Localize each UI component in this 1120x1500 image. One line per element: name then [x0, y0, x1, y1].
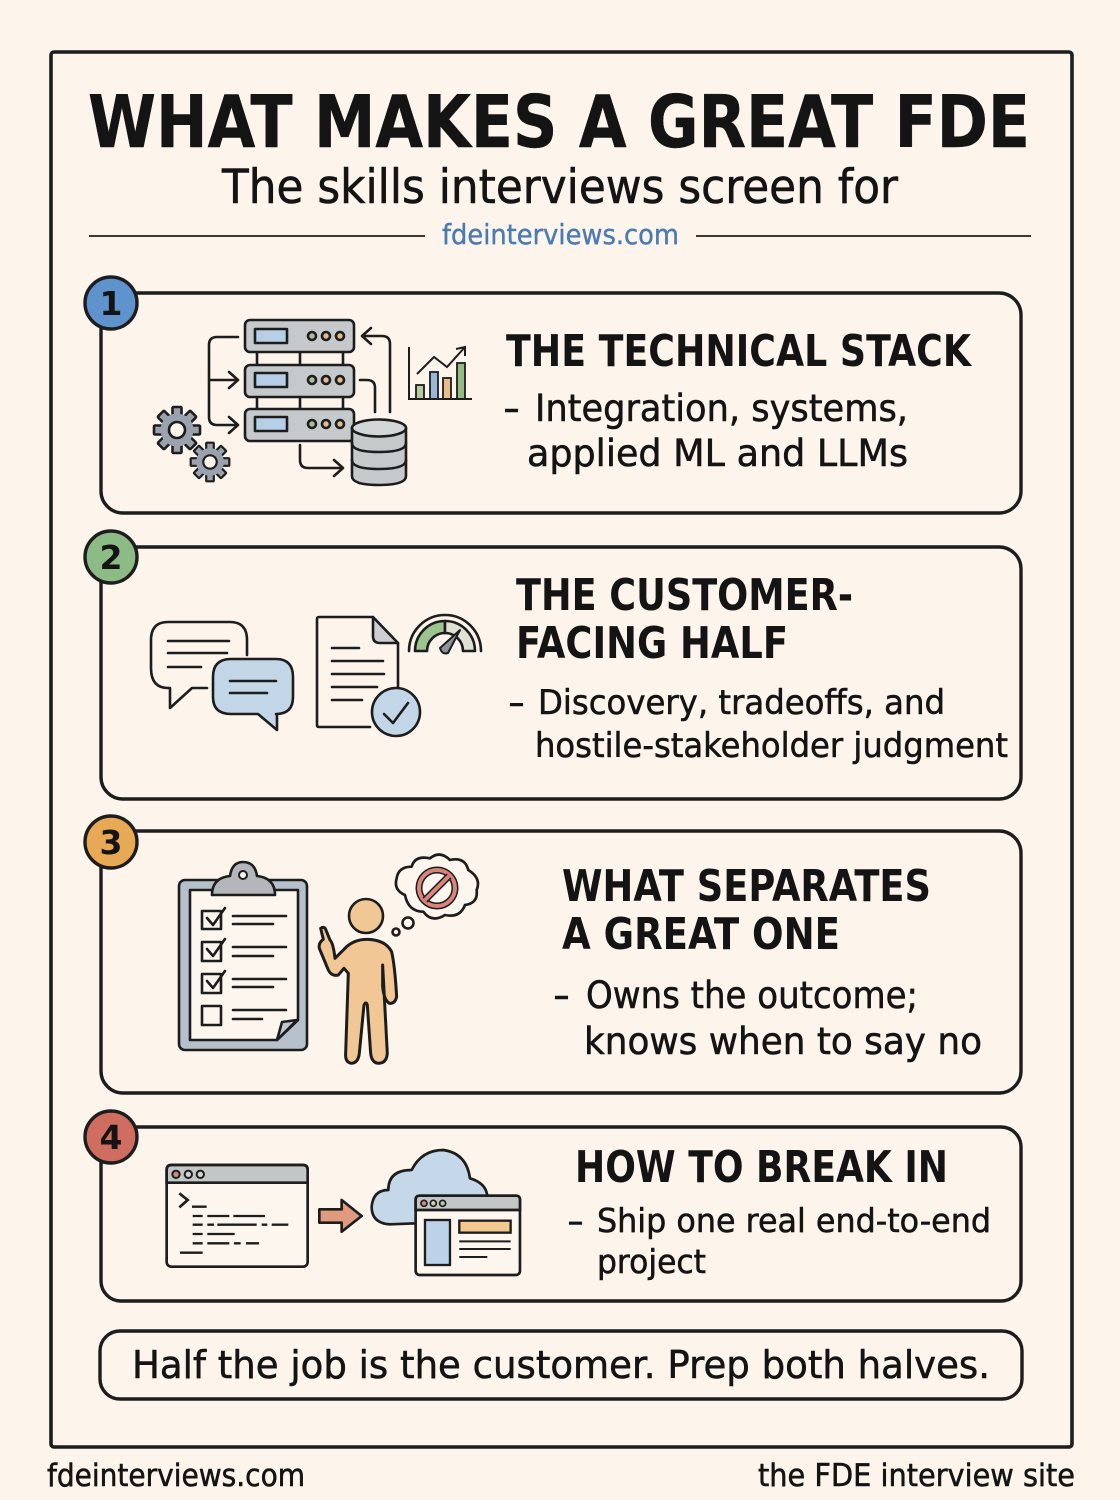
icon: servers, database, gears and chart — [154, 320, 472, 485]
heading 2: THE CUSTOMER- — [516, 570, 853, 621]
description 4: Ship one real end-to-end — [597, 1201, 991, 1240]
icon: gauge — [409, 615, 481, 653]
icon: thought bubble with no sign — [392, 855, 478, 936]
description 3 — [553, 974, 982, 1063]
heading 2: FACING HALF — [516, 618, 788, 669]
panel 3: what separates a great one — [85, 816, 1021, 1093]
heading 3: A GREAT ONE — [562, 909, 840, 960]
description 2 — [508, 683, 1008, 766]
panel 1: the technical stack — [85, 277, 1021, 513]
badge 2 — [85, 531, 137, 583]
description 2: Discovery, tradeoffs, and — [538, 683, 945, 723]
icon: growth chart — [409, 347, 472, 399]
footer left: fdeinterviews.com — [47, 1458, 305, 1494]
panel 4: how to break in — [85, 1111, 1021, 1301]
icon: chat bubbles — [151, 622, 293, 730]
badge 2: 2 — [100, 538, 122, 577]
website link with rules: fdeinterviews.com — [442, 218, 679, 251]
description 3: knows when to say no — [584, 1020, 982, 1063]
icon: person thinking — [319, 855, 478, 1063]
heading 3: WHAT SEPARATES — [562, 861, 931, 912]
callout: takeaway — [100, 1331, 1022, 1399]
badge 1 — [85, 277, 137, 329]
badge 1: 1 — [100, 284, 122, 323]
heading 3 — [562, 861, 931, 960]
icon: document with check — [317, 617, 420, 736]
description 3: Owns the outcome; — [586, 974, 918, 1017]
badge 3: 3 — [100, 823, 122, 862]
icon: terminal window — [167, 1165, 308, 1267]
description 4: project — [597, 1242, 706, 1281]
description 1 — [503, 387, 908, 475]
footer right: the FDE interview site — [758, 1458, 1075, 1494]
heading 4: HOW TO BREAK IN — [575, 1142, 948, 1193]
callout: takeaway: Half the job is the customer. Prep both halves. — [132, 1343, 990, 1387]
heading 1: THE TECHNICAL STACK — [506, 326, 973, 377]
description 1: - — [503, 387, 520, 430]
icon: cloud with browser window — [372, 1150, 520, 1275]
heading 2 — [516, 570, 853, 669]
description 1: Integration, systems, — [535, 387, 908, 430]
description 3: - — [553, 974, 570, 1017]
icon: database — [352, 420, 406, 485]
description 4 — [567, 1201, 991, 1281]
badge 4: 4 — [100, 1118, 122, 1157]
badge 3 — [85, 816, 137, 868]
description 2: - — [508, 683, 525, 723]
icon: gears — [154, 407, 229, 481]
description 1: applied ML and LLMs — [527, 432, 908, 475]
description 4: - — [567, 1201, 584, 1240]
icon: clipboard checklist — [179, 862, 307, 1050]
description 2: hostile-stakeholder judgment — [535, 726, 1008, 766]
panel 2: the customer-facing half — [85, 531, 1021, 799]
arrow — [319, 1200, 362, 1232]
subtitle: The skills interviews screen for — [221, 160, 899, 215]
badge 4 — [85, 1111, 137, 1163]
